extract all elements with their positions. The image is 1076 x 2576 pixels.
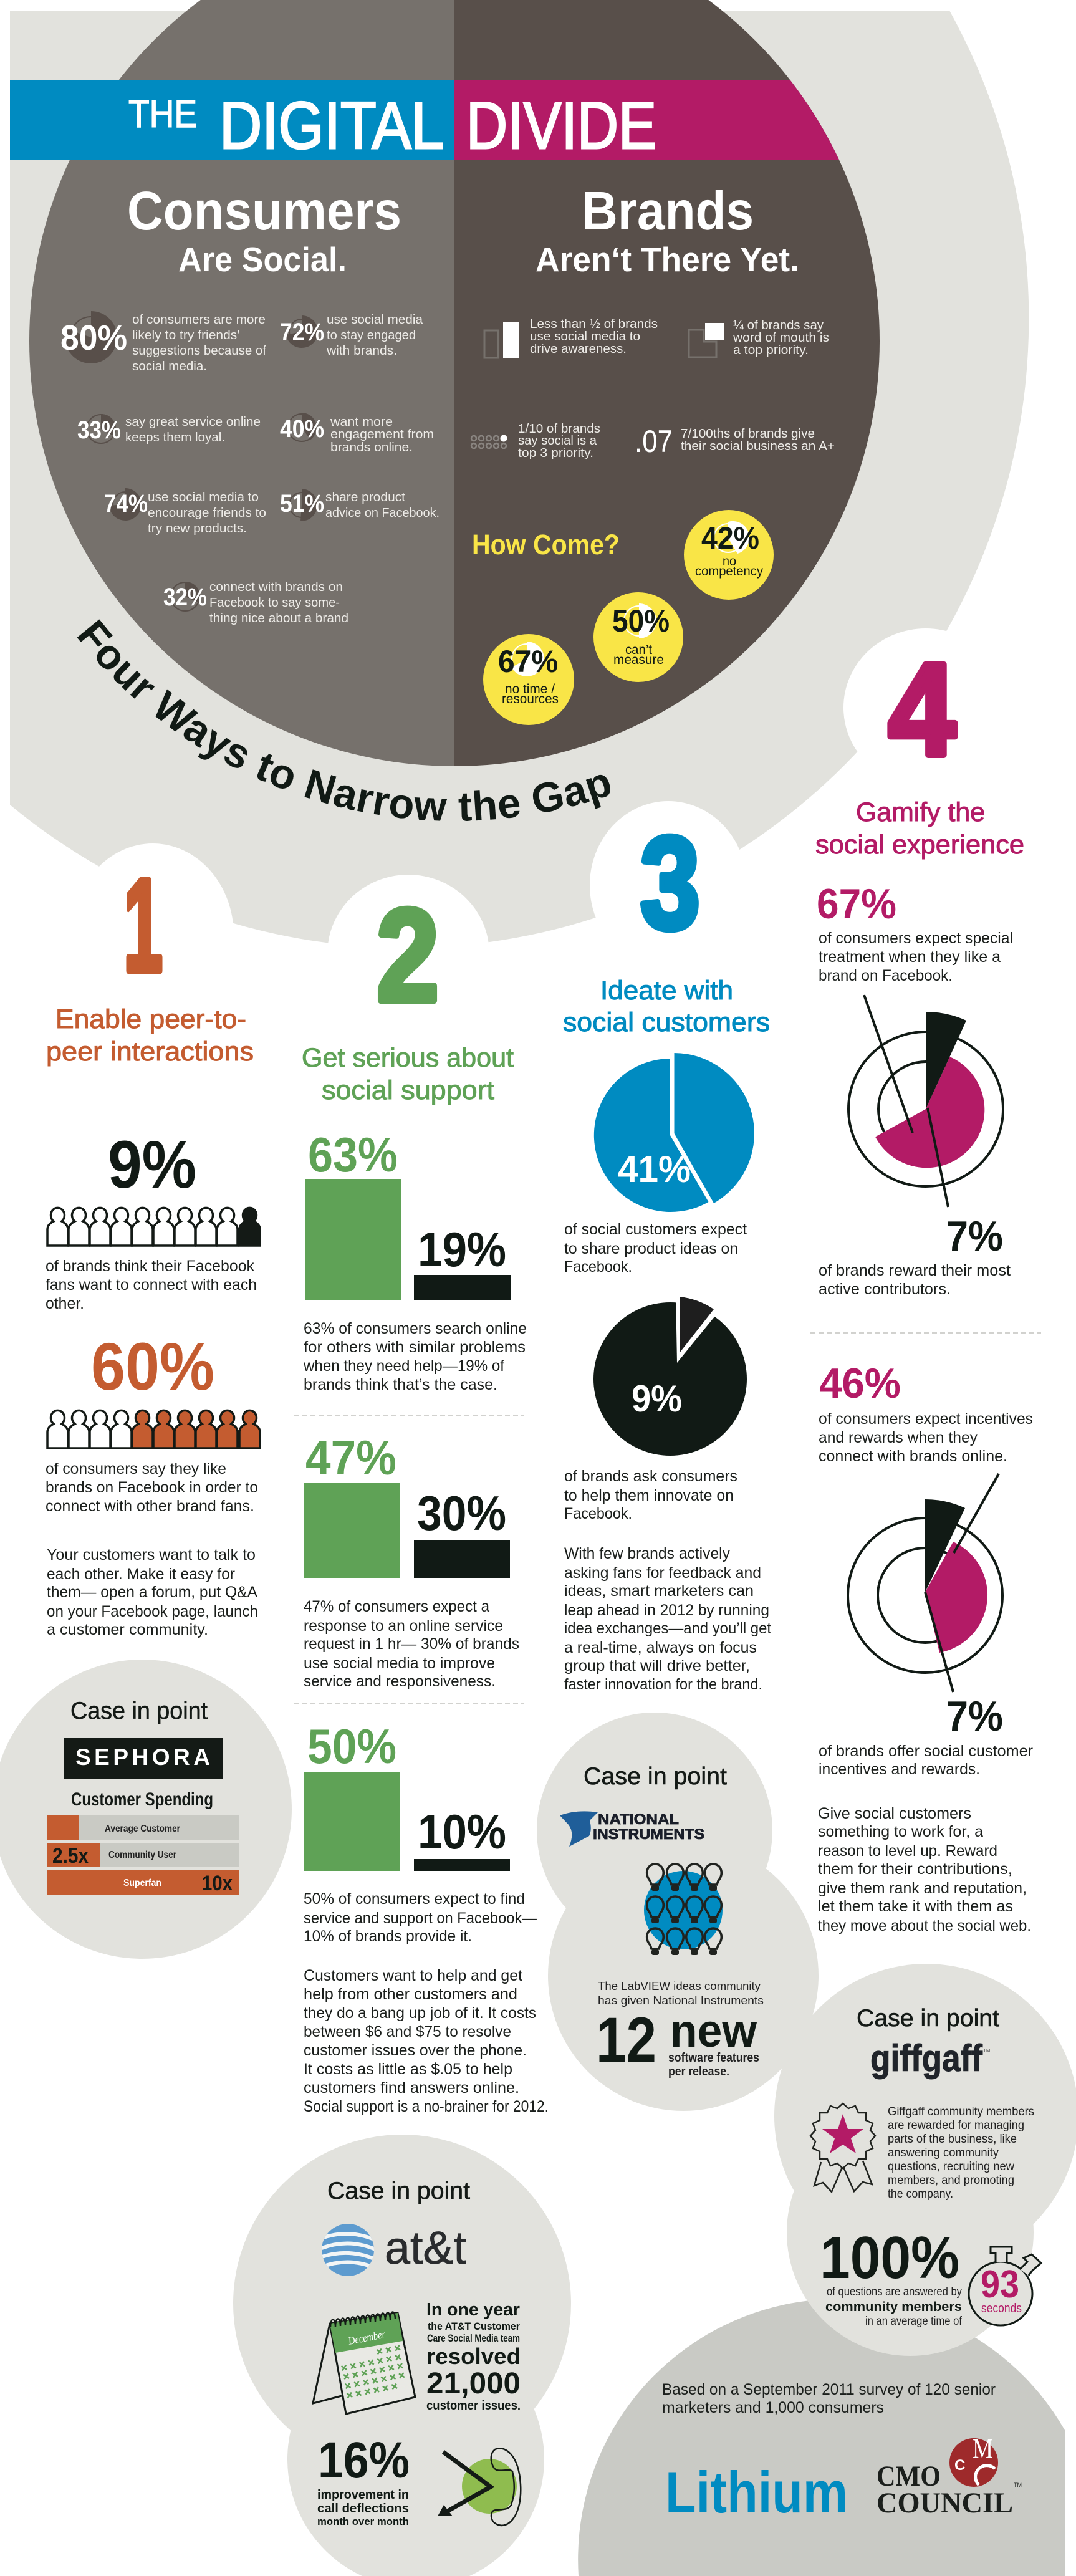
stat: 67% of consumers: 67%: [817, 880, 896, 928]
stat: 7% reward: active contributors.: [819, 1281, 951, 1298]
text block: step 2 advice: they do a bang up job of it. It costs: [304, 2004, 536, 2022]
stat: 40%: brands online.: [330, 441, 413, 454]
people icons: 6 of 10 filled: [47, 1410, 260, 1448]
text block: AT&T result: customer issues.: [426, 2399, 521, 2413]
stat: 100%: in an average time of: [865, 2315, 963, 2328]
text block: step 2 advice: between $6 and $75 to resolve: [304, 2023, 511, 2040]
text block: 9%: to help them innovate on: [564, 1487, 734, 1504]
text block: AT&T result: Care Social Media team: [427, 2332, 520, 2344]
bar chart: customer spending: Superfan: [123, 1878, 161, 1888]
stat: 33%: say great service online: [125, 415, 261, 429]
stat: 100%: of questions are answered by: [827, 2285, 962, 2299]
CMO Council logo: CMO: [877, 2460, 941, 2492]
stat: 51%: advice on Facebook.: [325, 506, 440, 520]
yellow circle: 50%: 50%: [612, 603, 670, 638]
stat: quarter of brands: ¼ of brands say: [733, 319, 824, 332]
National Instruments logo: INSTRUMENTS: [593, 1826, 704, 1843]
bars: 63% vs 19%: 19%: [418, 1222, 506, 1277]
icon: calendar: × × × × × × ×: [343, 2369, 406, 2392]
panel: case in point National Instruments: new: [670, 2005, 757, 2057]
stat: .07: [635, 424, 835, 459]
yellow circle: 42%: [684, 510, 774, 600]
yellow circle: 42%: no: [723, 554, 736, 569]
text block: giffgaff: are rewarded for managing: [888, 2119, 1024, 2132]
stat: 46% of consumers: and rewards when they: [819, 1429, 978, 1446]
stat: 60% of consumers: connect with other brand fans.: [46, 1497, 254, 1515]
panel: case in point giffgaff: [774, 1964, 1076, 2356]
text block: step 2 advice: [304, 1967, 549, 2115]
text block: step 4 advice: [818, 1805, 1031, 1934]
stat: 1/10 of brands: 1/10 of brands: [518, 422, 600, 436]
giffgaff logo: giffgaff: [870, 2037, 983, 2079]
icon: stopwatch 93 seconds: 93: [981, 2263, 1019, 2306]
CMO Council logo: [877, 2433, 1022, 2519]
stat: 32%: connect with brands on: [209, 580, 343, 594]
text block: 47%: service and responsiveness.: [304, 1673, 496, 1690]
text block: step 2 advice: customer issues over the phone.: [304, 2042, 527, 2059]
stat: 7% reward: [819, 1213, 1011, 1298]
stat: 33%: 33%: [77, 416, 121, 444]
stat: 80%: likely to try friends’: [132, 329, 240, 342]
heading: consumers: [127, 181, 401, 279]
text block: 47%: response to an online service: [304, 1617, 503, 1635]
number 4: 4: [888, 636, 956, 783]
stat: 74%: encourage friends to: [148, 506, 266, 520]
text block: step 2 advice: help from other customers and: [304, 1986, 517, 2003]
stat: 74%: 74%: [104, 490, 148, 517]
radial chart: 46% vs 7%: [848, 1474, 1002, 1692]
stat: 67% of consumers: of consumers expect special: [819, 930, 1013, 947]
stat: 9% of brands: fans want to connect with each: [46, 1276, 257, 1294]
text block: step 2 advice: Social support is a no-brainer for 2012.: [304, 2098, 549, 2115]
bars: 63% vs 19%: [305, 1127, 511, 1300]
panel: footer: marketers and 1,000 consumers: [662, 2399, 884, 2416]
stat: 72%: to stay engaged: [327, 329, 416, 342]
heading: step 4: [815, 797, 1024, 860]
text block: 9%: [564, 1468, 737, 1522]
stat: 16%: improvement in: [317, 2488, 409, 2502]
stat: 74%: use social media to: [148, 491, 259, 504]
stat: half of brands: [484, 317, 658, 358]
heading: step 1: [46, 1004, 254, 1067]
text block: step 1 advice: on your Facebook page, launch: [47, 1603, 258, 1620]
heading: brands: Aren‘t There Yet.: [536, 240, 799, 279]
stat: half of brands: drive awareness.: [530, 342, 627, 356]
stat: 32%: thing nice about a brand: [209, 612, 348, 625]
CMO Council logo: C: [954, 2457, 965, 2474]
heading: step 2: Get serious about: [302, 1043, 514, 1073]
stat: 7% offer: [819, 1693, 1033, 1778]
heading: how come: How Come?: [472, 529, 620, 560]
stat: 16%: 16%: [318, 2432, 410, 2489]
text block: step 1 advice: a customer community.: [47, 1621, 208, 1638]
number 1: 1: [123, 852, 163, 999]
stat: 16%: call deflections: [317, 2502, 409, 2516]
lightbulb grid: [644, 1864, 723, 1955]
yellow circle: 50%: [593, 592, 683, 682]
yellow circle: 50%: can’t: [625, 643, 652, 657]
panel: case in point National Instruments: software features: [668, 2051, 759, 2065]
text block: step 4 advice: give them rank and reputation,: [818, 1880, 1027, 1897]
stat: 60% of consumers: of consumers say they like: [46, 1460, 226, 1478]
stat: 1/10 of brands: top 3 priority.: [518, 446, 593, 460]
stat: 46% of consumers: 46%: [819, 1360, 901, 1407]
stat: 100%: [820, 2224, 963, 2328]
heading: step 2: [302, 1043, 514, 1105]
pie chart: 9%: [593, 1294, 747, 1456]
stat: 9% of brands: [46, 1127, 260, 1312]
text block: step 3 advice: [564, 1545, 771, 1693]
text block: step 3 advice: asking fans for feedback and: [564, 1564, 761, 1582]
bars: 50% vs 10%: [304, 1719, 510, 1871]
text block: 63%: [303, 1320, 527, 1393]
bar chart: customer spending: 2.5x: [52, 1844, 89, 1868]
stat: 72%: use social media: [327, 313, 423, 327]
pie chart: 41%: [594, 1053, 754, 1212]
panel: case in point Sephora: Customer Spending: [71, 1789, 213, 1810]
stat: 67% of consumers: [817, 880, 1013, 984]
Lithium logo: Lithium: [665, 2459, 848, 2525]
heading: brands: Brands: [582, 181, 754, 241]
heading: consumers: Are Social.: [178, 240, 347, 279]
text block: giffgaff: members, and promoting: [888, 2174, 1014, 2187]
text block: step 3 advice: idea exchanges—and you’ll get: [564, 1620, 771, 1637]
title banner: THE: [128, 93, 197, 136]
text block: giffgaff: questions, recruiting new: [888, 2160, 1014, 2173]
stat: 80%: social media.: [132, 360, 207, 373]
text block: step 3 advice: With few brands actively: [564, 1545, 730, 1562]
stat: 32%: Facebook to say some-: [209, 596, 340, 610]
text block: 47%: 47% of consumers expect a: [304, 1598, 489, 1615]
title banner: DIGITAL: [219, 88, 444, 163]
text block: 41%: Facebook.: [564, 1258, 632, 1276]
stat: 51%: [280, 489, 440, 521]
text block: 63%: 63% of consumers search online: [304, 1320, 527, 1337]
panel: central split circle: [25, 0, 885, 773]
icon: calendar: × × ×: [375, 2342, 401, 2358]
CMO Council logo: COUNCIL: [877, 2487, 1013, 2519]
bar chart: customer spending: 10x: [202, 1872, 233, 1895]
stat: 40%: [280, 413, 434, 454]
text block: step 2 advice: It costs as little as $.05 to help: [304, 2060, 512, 2078]
text block: 47%: request in 1 hr— 30% of brands: [304, 1635, 519, 1653]
icon: rosette badge: [810, 2103, 875, 2192]
heading: step 3: social customers: [563, 1007, 770, 1037]
stat: 74%: try new products.: [148, 522, 247, 536]
text block: giffgaff: Giffgaff community members: [888, 2105, 1034, 2118]
stat: 46% of consumers: connect with brands online.: [819, 1448, 1007, 1465]
panel: case in point National Instruments: per release.: [668, 2065, 729, 2079]
icon: calendar: [313, 2312, 415, 2414]
stat: 32%: 32%: [163, 584, 207, 611]
stat: quarter of brands: [689, 319, 829, 357]
heading: step 2: social support: [322, 1075, 494, 1105]
text block: step 1 advice: them— open a forum, put Q&A: [47, 1584, 257, 1601]
text block: step 4 advice: they move about the social web.: [818, 1917, 1031, 1934]
panel: case in point National Instruments: has given National Instruments: [598, 1994, 764, 2007]
AT&T logo: [322, 2222, 466, 2276]
stat: 32%: [163, 580, 348, 625]
bars: 47% vs 30%: [304, 1430, 510, 1578]
stat: 7% offer: of brands offer social customer: [819, 1742, 1033, 1760]
text block: step 3 advice: ideas, smart marketers can: [564, 1582, 754, 1600]
text block: 41%: [564, 1221, 747, 1276]
yellow circle: 67%: 67%: [498, 644, 558, 679]
text block: step 3 advice: a real-time, always on focus: [564, 1639, 757, 1656]
number 2: 2: [377, 882, 439, 1029]
icon: calendar: × × × × × × ×: [340, 2351, 402, 2374]
stat: 80%: [60, 311, 266, 373]
radial chart: 67% vs 7%: [848, 995, 1003, 1207]
stat: half of brands: Less than ½ of brands: [530, 317, 658, 331]
panel: case in point AT&T: [233, 2135, 571, 2576]
text block: 41%: to share product ideas on: [564, 1240, 738, 1257]
icon: stopwatch 93 seconds: [969, 2247, 1041, 2325]
stat: .07: their social business an A+: [681, 440, 835, 453]
heading: brands: [536, 181, 799, 279]
text block: 47%: use social media to improve: [304, 1655, 495, 1672]
stat: .07: .07: [635, 424, 673, 459]
stat: 72%: [280, 313, 423, 358]
people icons: 1 of 10 filled: [47, 1208, 260, 1246]
yellow circle: 50%: measure: [613, 653, 664, 667]
stat: 60% of consumers: brands on Facebook in order to: [46, 1479, 258, 1496]
stat: half of brands: use social media to: [530, 330, 640, 344]
stat: 1/10 of brands: say social is a: [518, 434, 597, 448]
bars: 50% vs 10%: 10%: [418, 1804, 506, 1859]
stat: 16%: [317, 2432, 410, 2527]
stat: 7% reward: of brands reward their most: [819, 1262, 1011, 1279]
bars: 47% vs 30%: 47%: [305, 1430, 396, 1485]
stat: 100%: 100%: [820, 2224, 959, 2291]
stat: 9% of brands: of brands think their Facebook: [46, 1257, 254, 1275]
text block: step 3 advice: faster innovation for the brand.: [564, 1676, 762, 1693]
text block: giffgaff: parts of the business, like: [888, 2133, 1017, 2146]
text block: AT&T result: the AT&T Customer: [428, 2320, 520, 2332]
stat: 16%: month over month: [317, 2516, 409, 2527]
heading: step 4: social experience: [815, 830, 1024, 860]
stat: 74%: [104, 488, 266, 536]
stat: 7% reward: 7%: [946, 1213, 1003, 1260]
panel: case in point AT&T: Case in point: [327, 2178, 470, 2204]
pie chart: 9%: 9%: [632, 1378, 682, 1420]
number 3: 3: [640, 809, 700, 956]
background: gray oval: [10, 11, 1029, 948]
text block: AT&T result: In one year: [426, 2300, 520, 2320]
yellow circle: 42%: competency: [695, 564, 763, 579]
bars: 50% vs 10%: 50%: [307, 1719, 396, 1774]
bar chart: customer spending: [47, 1815, 239, 1895]
text block: step 4 advice: them for their contributions,: [818, 1860, 1012, 1878]
stat: 80%: 80%: [60, 318, 127, 358]
CMO Council logo: TM: [1014, 2482, 1022, 2488]
stat: 33%: [77, 414, 261, 445]
stat: 9% of brands: 9%: [108, 1127, 196, 1202]
icon: phone deflection arrow: [438, 2448, 521, 2526]
text block: giffgaff: [888, 2105, 1034, 2201]
yellow circle: 67%: [483, 634, 574, 725]
heading: step 1: Enable peer-to-: [55, 1004, 246, 1034]
AT&T logo: at&t: [385, 2222, 466, 2274]
stat: 60% of consumers: [46, 1329, 260, 1515]
bar chart: customer spending: Community User: [108, 1850, 176, 1860]
panel: case in point National Instruments: [537, 1713, 819, 2111]
text block: AT&T result: [426, 2300, 521, 2413]
text block: AT&T result: resolved: [426, 2343, 521, 2369]
yellow circle: 42%: 42%: [701, 521, 759, 555]
icon: calendar: December: [347, 2328, 387, 2347]
stat: 33%: keeps them loyal.: [125, 431, 225, 445]
stat: 51%: 51%: [280, 490, 324, 517]
icon: calendar: × × × × × × ×: [342, 2360, 405, 2383]
National Instruments logo: [560, 1811, 704, 1847]
text block: AT&T result: 21,000: [426, 2367, 521, 2400]
stat: 80%: suggestions because of: [132, 344, 266, 358]
stat: 46% of consumers: of consumers expect incentives: [819, 1410, 1033, 1428]
stat: 72%: 72%: [280, 319, 324, 346]
text block: step 2 advice: customers find answers online.: [304, 2079, 519, 2097]
giffgaff logo: TM: [983, 2048, 991, 2054]
title banner: [10, 80, 656, 163]
panel: case in point Sephora: Case in point: [70, 1698, 208, 1724]
pie chart: 41%: 41%: [618, 1148, 691, 1190]
text block: 50%: service and support on Facebook—: [304, 1910, 537, 1927]
stat: 67% of consumers: brand on Facebook.: [819, 967, 953, 984]
stat: 46% of consumers: [819, 1360, 1033, 1465]
panel: case in point National Instruments: The LabVIEW ideas community: [598, 1980, 761, 1992]
CMO Council logo: M: [973, 2433, 993, 2464]
text block: step 3 advice: leap ahead in 2012 by running: [564, 1602, 769, 1619]
stat: 7% offer: 7%: [946, 1693, 1003, 1740]
text block: 50%: 50% of consumers expect to find: [304, 1890, 525, 1908]
text block: 63%: brands think that’s the case.: [304, 1376, 497, 1393]
heading: consumers: Consumers: [127, 181, 401, 241]
yellow circle: 67%: resources: [502, 692, 559, 706]
icon: calendar: × × × × × ×: [345, 2380, 398, 2401]
text block: step 1 advice: [47, 1546, 258, 1638]
Sephora logo: [64, 1738, 223, 1779]
yellow circle: 67%: no time /: [505, 682, 555, 696]
text block: 9%: of brands ask consumers: [564, 1468, 737, 1485]
heading: step 1: peer interactions: [46, 1037, 254, 1067]
stat: 7% offer: incentives and rewards.: [819, 1761, 980, 1778]
text block: step 3 advice: group that will drive better,: [564, 1657, 750, 1675]
panel: case in point National Instruments: Case in point: [584, 1763, 727, 1790]
text block: 50%: [304, 1890, 537, 1945]
text block: step 4 advice: Give social customers: [818, 1805, 971, 1822]
heading: step 3: Ideate with: [600, 976, 733, 1006]
text block: 9%: Facebook.: [564, 1505, 632, 1522]
stat: 40%: 40%: [280, 415, 324, 443]
text block: step 4 advice: reason to level up. Reward: [818, 1842, 997, 1860]
text block: giffgaff: the company.: [888, 2188, 953, 2201]
stat: 100%: community members: [825, 2300, 962, 2314]
stat: quarter of brands: a top priority.: [733, 344, 809, 357]
panel: footer: Based on a September 2011 survey of 120 senior: [662, 2381, 996, 2398]
stat: 67% of consumers: treatment when they like a: [819, 948, 1001, 966]
stat: 9% of brands: other.: [46, 1295, 84, 1312]
panel: case in point National Instruments: 12: [596, 2004, 656, 2075]
title banner: DIVIDE: [466, 88, 656, 163]
heading: step 3: [563, 976, 770, 1037]
text block: 63%: for others with similar problems: [304, 1338, 526, 1356]
stat: 72%: with brands.: [326, 344, 397, 358]
text block: 47%: [304, 1598, 519, 1690]
bars: 47% vs 30%: 30%: [417, 1486, 506, 1540]
National Instruments logo: NATIONAL: [598, 1811, 679, 1828]
bar chart: customer spending: Average Customer: [105, 1824, 180, 1834]
text block: step 4 advice: let them take it with them as: [818, 1898, 1013, 1915]
white domes behind the numbers: [72, 628, 1008, 1033]
text block: 50%: 10% of brands provide it.: [304, 1928, 472, 1945]
Sephora logo: SEPHORA: [75, 1744, 210, 1770]
curved heading: four ways: Four Ways to Narrow the Gap: [77, 619, 610, 821]
bars: 63% vs 19%: 63%: [308, 1127, 398, 1182]
panel: case in point giffgaff: Case in point: [857, 2005, 999, 2032]
stat: 80%: of consumers are more: [132, 313, 266, 327]
text block: 41%: of social customers expect: [564, 1221, 747, 1238]
text block: step 1 advice: Your customers want to talk to: [47, 1546, 256, 1564]
stat: 60% of consumers: 60%: [91, 1329, 214, 1404]
stat: 40%: want more: [330, 415, 393, 429]
stat: .07: 7/100ths of brands give: [681, 427, 815, 441]
text block: step 1 advice: each other. Make it easy for: [47, 1565, 235, 1583]
stat: 40%: engagement from: [330, 428, 434, 441]
text block: giffgaff: answering community: [888, 2146, 999, 2160]
text block: 63%: when they need help—19% of: [303, 1357, 504, 1375]
heading: step 4: Gamify the: [856, 797, 985, 827]
panel: footer: [578, 2299, 1065, 2576]
panel: case in point Sephora: [0, 1660, 292, 1959]
text block: step 4 advice: something to work for, a: [818, 1823, 983, 1840]
text block: step 2 advice: Customers want to help and get: [304, 1967, 522, 1984]
stat: quarter of brands: word of mouth is: [733, 331, 829, 345]
stat: 1/10 of brands: [471, 422, 600, 460]
stat: 51%: share product: [325, 491, 405, 504]
icon: stopwatch 93 seconds: seconds: [981, 2302, 1022, 2315]
